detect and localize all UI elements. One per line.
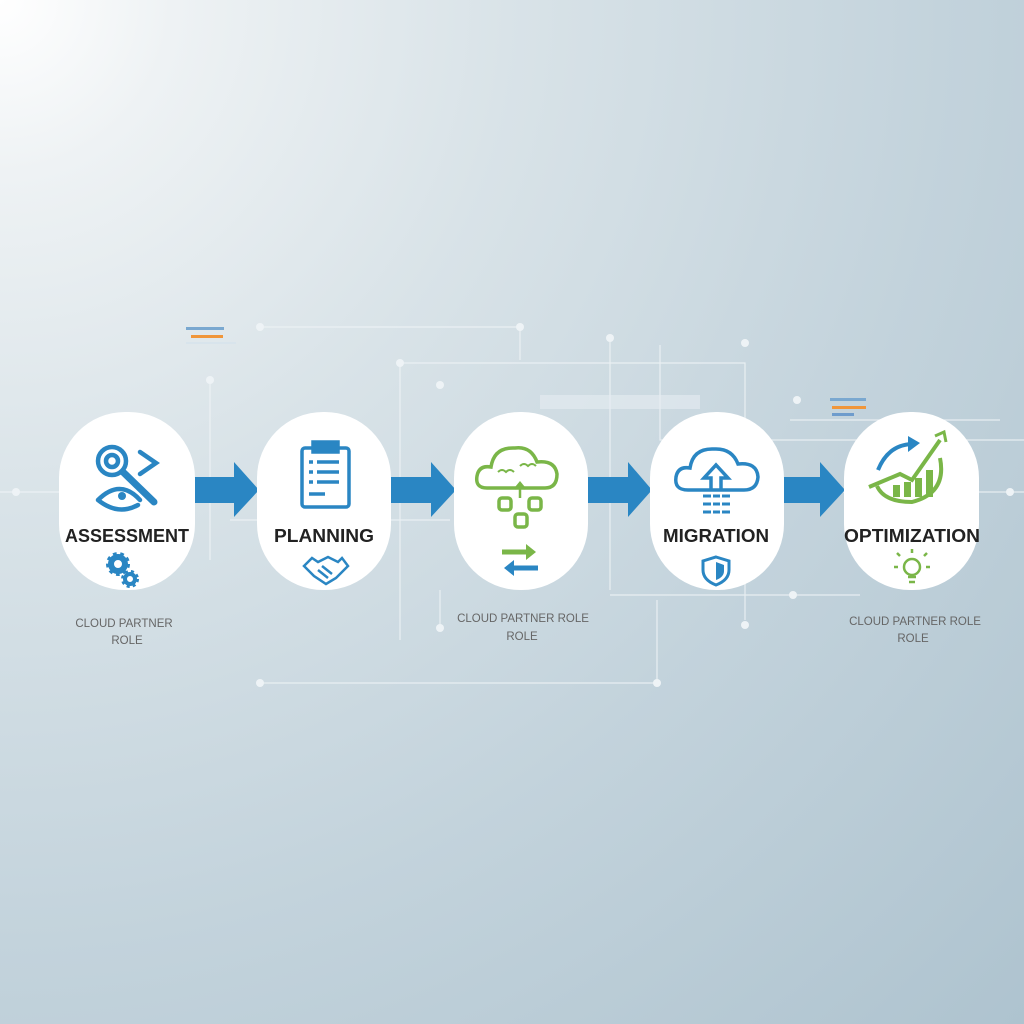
decorative legend bars — [186, 327, 866, 416]
caption: assessment role: ROLE — [111, 635, 143, 647]
caption: optimization role — [849, 616, 981, 645]
icon: clipboard — [302, 442, 349, 507]
icon: magnifier eye — [98, 447, 156, 509]
step card: assessment — [59, 412, 195, 590]
caption: optimization role: ROLE — [897, 633, 929, 645]
caption: assessment role — [75, 618, 173, 647]
heading: migration: MIGRATION — [663, 526, 769, 546]
heading: optimization: OPTIMIZATION — [844, 526, 980, 546]
caption: assessment role: CLOUD PARTNER — [75, 618, 173, 630]
icon: lightbulb — [894, 549, 930, 582]
step card: planning — [257, 412, 391, 590]
heading: planning: PLANNING — [274, 526, 374, 546]
caption: cloud role — [457, 613, 589, 643]
icon: growth chart — [869, 432, 946, 502]
icon: green cloud with databases — [477, 448, 557, 527]
step card: optimization — [844, 412, 980, 590]
caption: optimization role: CLOUD PARTNER ROLE — [849, 616, 981, 628]
heading: assessment: ASSESSMENT — [65, 526, 189, 546]
icon: handshake — [304, 557, 348, 584]
background circuit lines — [0, 327, 1024, 683]
icon: shield — [703, 557, 729, 585]
caption: cloud role: CLOUD PARTNER ROLE — [457, 613, 589, 625]
step card: migration — [650, 412, 784, 590]
icon: swap arrows — [502, 552, 538, 568]
arrows between steps — [193, 462, 845, 517]
caption: cloud role: ROLE — [506, 631, 538, 643]
icon: cloud upload — [676, 449, 758, 512]
icon: gears — [108, 554, 138, 586]
step card: cloud transfer — [454, 412, 588, 590]
